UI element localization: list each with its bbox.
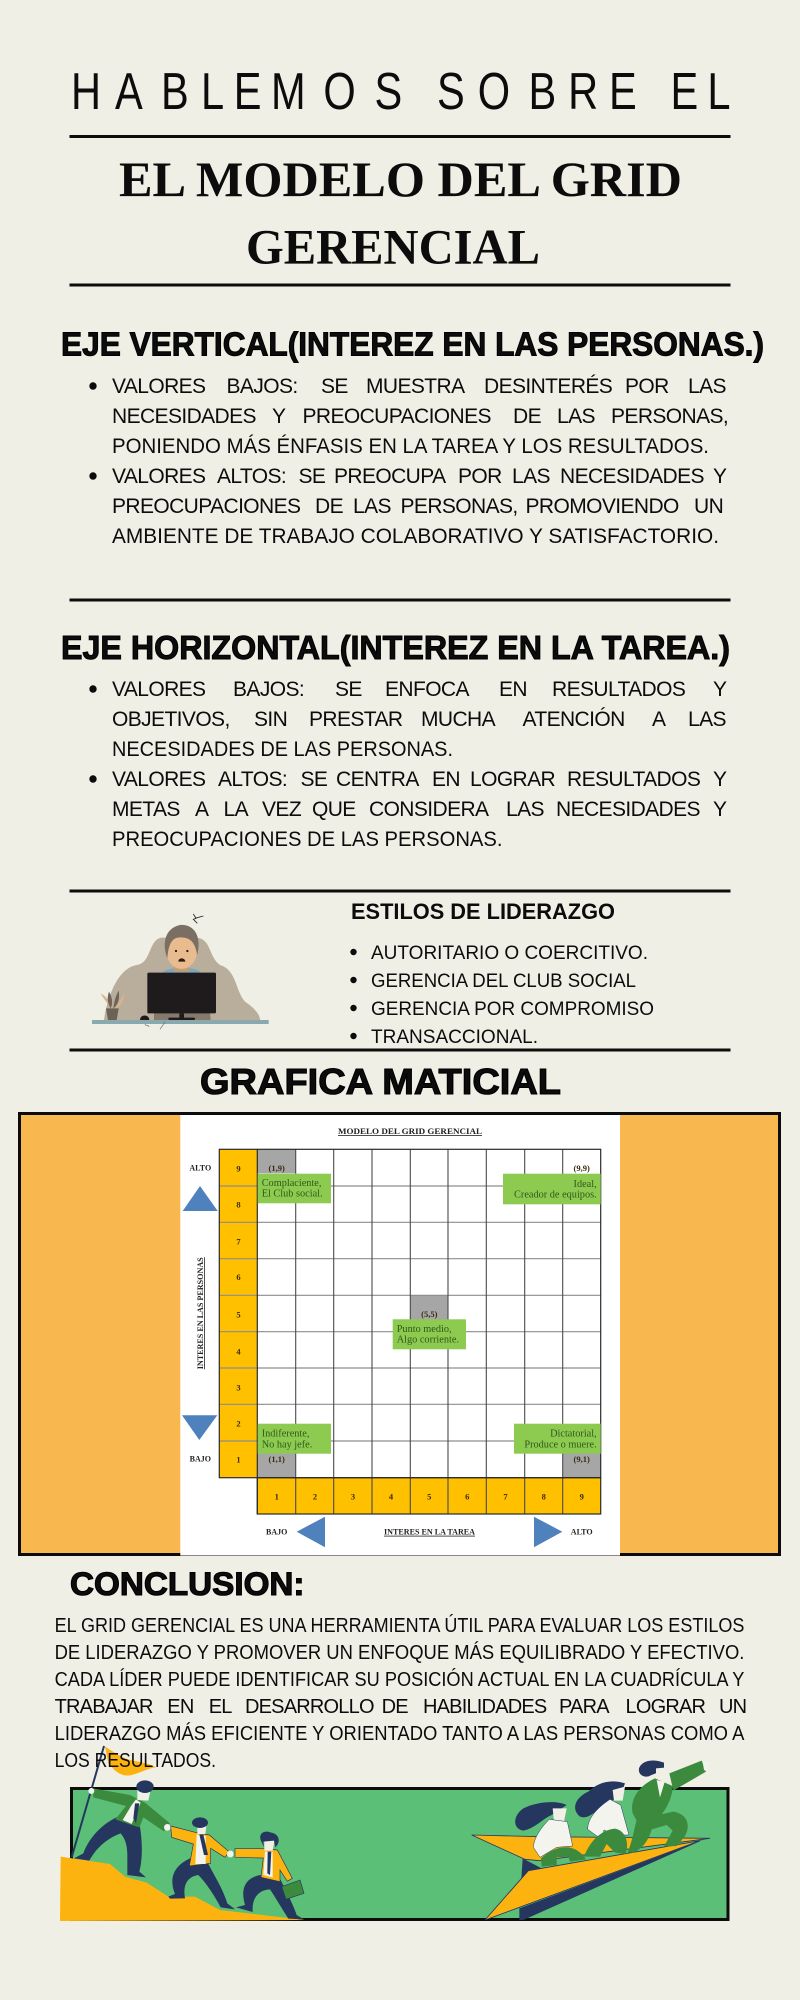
text block: eje vertical bullets: LAS xyxy=(557,405,595,428)
text block: eje horizontal bullets: MUCHA xyxy=(421,708,496,731)
heading: eje vertical: EJE VERTICAL(INTEREZ EN LAS PERSONAS.) xyxy=(61,326,764,364)
text block: eje horizontal bullets: OBJETIVOS, xyxy=(112,708,230,731)
text block: eje horizontal bullets: SIN xyxy=(254,708,287,731)
text block: conclusion: LIDERAZGO MÁS EFICIENTE Y ORIENTADO TANTO A LAS PERSONAS COMO A xyxy=(55,1722,745,1745)
text block: eje vertical bullets: ALTOS: xyxy=(217,465,286,488)
icon: stressed man at desk xyxy=(92,914,269,1029)
text block: estilos list xyxy=(350,943,654,1048)
text block: eje horizontal bullets xyxy=(89,678,727,851)
callout: complaciente xyxy=(258,1174,331,1203)
axis labels and arrows: ALTO xyxy=(189,1163,211,1172)
text block: conclusion xyxy=(55,1614,746,1772)
text block: conclusion: EL GRID GERENCIAL ES UNA HERRAMIENTA ÚTIL PARA EVALUAR LOS ESTILOS xyxy=(55,1614,744,1637)
axis labels and arrows: INTERES EN LAS PERSONAS xyxy=(196,1257,205,1369)
callout: dictatorial: Dictatorial, xyxy=(550,1429,597,1440)
callout: dictatorial: Produce o muere. xyxy=(524,1439,597,1450)
text block: eje horizontal bullets: Y xyxy=(713,768,727,791)
text block: eje horizontal bullets: NECESIDADES DE LAS PERSONAS. xyxy=(112,738,453,761)
text block: eje horizontal bullets: LOGRAR xyxy=(470,768,556,791)
chart: grid: 2 xyxy=(236,1418,241,1428)
text block: eje horizontal bullets: QUE xyxy=(312,798,356,821)
text block: conclusion: DE xyxy=(382,1696,408,1718)
text block: estilos list: GERENCIA POR COMPROMISO xyxy=(371,999,654,1020)
text block: eje vertical bullets: SE xyxy=(298,465,326,488)
text block: eje vertical bullets: VALORES xyxy=(112,465,206,488)
text block: eje horizontal bullets: SE xyxy=(335,678,362,701)
text block: eje horizontal bullets: PRESTAR xyxy=(309,708,403,731)
text block: eje vertical bullets: UN xyxy=(694,495,723,518)
text block: conclusion: LOS RESULTADOS. xyxy=(55,1750,216,1772)
text block: eje vertical bullets: PONIENDO MÁS ÉNFASIS EN LA TAREA Y LOS RESULTADOS. xyxy=(112,435,709,458)
text block: eje horizontal bullets: CONSIDERA xyxy=(369,798,489,821)
chart: grid: (9,1) xyxy=(574,1454,590,1464)
text block: eje vertical bullets: NECESIDADES xyxy=(112,405,257,428)
text block: eje vertical bullets: DE xyxy=(513,405,542,428)
heading: estilos de liderazgo: ESTILOS DE LIDERAZGO xyxy=(351,899,615,924)
text block: eje horizontal bullets: METAS xyxy=(112,798,180,821)
chart: grid: 1 xyxy=(275,1492,279,1502)
text block: eje vertical bullets: PREOCUPA xyxy=(334,465,446,488)
text block: eje horizontal bullets: VALORES xyxy=(112,678,206,701)
text block: conclusion: DE LIDERAZGO Y PROMOVER UN ENFOQUE MÁS EQUILIBRADO Y EFECTIVO. xyxy=(55,1641,744,1664)
illustration: team climbing with flag xyxy=(60,1746,305,1921)
chart: grid: 5 xyxy=(427,1492,431,1502)
title: El modelo del grid gerencial xyxy=(119,151,682,274)
callout: indiferente: Indiferente, xyxy=(262,1429,309,1440)
chart: grid: 2 xyxy=(313,1492,317,1502)
text block: eje horizontal bullets: A xyxy=(652,708,666,731)
text block: estilos list: GERENCIA DEL CLUB SOCIAL xyxy=(371,971,636,992)
panel: green banner xyxy=(72,1788,728,1920)
text block: eje vertical bullets: PERSONAS, xyxy=(400,495,518,518)
text block: estilos list: TRANSACCIONAL. xyxy=(371,1027,538,1048)
callout: ideal: Ideal, xyxy=(574,1179,597,1190)
text block: conclusion: UN xyxy=(719,1696,746,1718)
callout: punto medio: Algo corriente. xyxy=(397,1334,459,1346)
text block: eje vertical bullets: SE xyxy=(321,375,348,398)
text block: eje vertical bullets: LAS xyxy=(353,495,391,518)
text block: eje vertical bullets: POR xyxy=(458,465,502,488)
callout: complaciente: Complaciente, xyxy=(262,1178,321,1189)
chart: grid: 9 xyxy=(236,1164,241,1174)
text block: eje horizontal bullets: A xyxy=(195,798,209,821)
text block: eje vertical bullets: Y xyxy=(713,465,727,488)
chart: grid: 3 xyxy=(236,1383,241,1393)
chart: grid: 7 xyxy=(503,1492,508,1502)
axis labels and arrows xyxy=(182,1163,593,1547)
text block: conclusion: CADA LÍDER PUEDE IDENTIFICAR SU POSICIÓN ACTUAL EN LA CUADRÍCULA Y xyxy=(55,1668,744,1691)
text block: eje vertical bullets: LAS xyxy=(512,465,550,488)
heading: eje horizontal: EJE HORIZONTAL(INTEREZ EN LA TAREA.) xyxy=(61,630,730,667)
text block: eje horizontal bullets: EN xyxy=(499,678,527,701)
text block: conclusion: EL xyxy=(209,1696,232,1718)
text block: eje horizontal bullets: RESULTADOS xyxy=(552,678,686,701)
text block: conclusion: PARA xyxy=(559,1696,610,1718)
text block: eje horizontal bullets: LAS xyxy=(688,708,726,731)
text block: eje vertical bullets: VALORES xyxy=(112,375,206,398)
chart: grid: 9 xyxy=(580,1492,584,1502)
text block: eje vertical bullets xyxy=(89,375,728,548)
text block: eje horizontal bullets: ATENCIÓN xyxy=(522,708,625,731)
text block: eje horizontal bullets: PREOCUPACIONES DE LAS PERSONAS. xyxy=(112,828,502,851)
text block: eje horizontal bullets: CENTRA xyxy=(336,768,419,791)
title: El modelo del grid gerencial: GERENCIAL xyxy=(246,218,540,274)
chart: grid: 8 xyxy=(236,1199,241,1209)
chart: grid: 3 xyxy=(351,1492,355,1502)
text block: eje horizontal bullets: ENFOCA xyxy=(385,678,470,701)
text block: eje vertical bullets: BAJOS: xyxy=(226,375,298,398)
text block: eje vertical bullets: MUESTRA xyxy=(366,375,465,398)
callout: punto medio: Punto medio, xyxy=(397,1324,452,1335)
chart title: MODELO DEL GRID GERENCIAL xyxy=(338,1127,482,1136)
text block: eje vertical bullets: PREOCUPACIONES xyxy=(112,495,301,518)
illustration: women on paper plane xyxy=(472,1761,711,1920)
text block: conclusion: DESARROLLO xyxy=(245,1696,374,1718)
chart: grid: 8 xyxy=(542,1492,546,1502)
text block: eje horizontal bullets: LA xyxy=(224,798,249,821)
callout: ideal: Creador de equipos. xyxy=(514,1190,597,1200)
text block: eje horizontal bullets: NECESIDADES xyxy=(556,798,701,821)
chart: grid: 1 xyxy=(236,1454,241,1464)
text block: eje horizontal bullets: VEZ xyxy=(262,798,302,821)
text block: eje horizontal bullets: Y xyxy=(713,678,727,701)
text block: eje vertical bullets: AMBIENTE DE TRABAJO COLABORATIVO Y SATISFACTORIO. xyxy=(112,525,719,548)
chart: grid: (1,9) xyxy=(269,1163,285,1173)
heading: grafica maticial: GRAFICA MATICIAL xyxy=(200,1061,561,1102)
text block: eje vertical bullets: PROMOVIENDO xyxy=(526,495,679,518)
chart: grid xyxy=(219,1149,601,1514)
title: El modelo del grid gerencial: EL MODELO DEL GRID xyxy=(119,151,682,207)
text block: conclusion: LOGRAR xyxy=(626,1696,706,1718)
axis labels and arrows: BAJO xyxy=(266,1528,287,1537)
chart: grid: 7 xyxy=(236,1237,241,1247)
text block: eje horizontal bullets: BAJOS: xyxy=(233,678,304,701)
text block: eje horizontal bullets: ALTOS: xyxy=(218,768,287,791)
text block: eje vertical bullets: DESINTERÉS xyxy=(484,375,613,398)
chart: grid: (9,9) xyxy=(574,1163,590,1173)
text block: estilos list: AUTORITARIO O COERCITIVO. xyxy=(371,943,648,964)
text block: eje vertical bullets: PREOCUPACIONES xyxy=(302,405,492,428)
callout: punto medio xyxy=(393,1319,466,1349)
text block: eje vertical bullets: DE xyxy=(315,495,344,518)
text block: eje horizontal bullets: EN xyxy=(432,768,460,791)
callout: dictatorial xyxy=(514,1424,601,1454)
title: Hablemos sobre el: HABLEMOS SOBRE EL xyxy=(71,62,730,120)
axis labels and arrows: BAJO xyxy=(190,1455,211,1464)
chart: grid: (5,5) xyxy=(421,1309,438,1319)
text block: eje horizontal bullets: LAS xyxy=(506,798,544,821)
text block: eje vertical bullets: POR xyxy=(625,375,669,398)
axis labels and arrows: ALTO xyxy=(571,1528,593,1537)
text block: eje horizontal bullets: Y xyxy=(713,798,727,821)
text block: conclusion: HABILIDADES xyxy=(423,1696,547,1718)
callout: indiferente xyxy=(258,1424,331,1454)
text block: eje horizontal bullets: VALORES xyxy=(112,768,206,791)
callout: complaciente: El Club social. xyxy=(262,1189,323,1200)
chart: grid: 6 xyxy=(236,1272,241,1282)
callout: ideal xyxy=(503,1174,601,1204)
chart: grid: 6 xyxy=(465,1492,469,1502)
text block: eje vertical bullets: NECESIDADES xyxy=(560,465,705,488)
chart: grid: 4 xyxy=(236,1346,241,1356)
text block: eje vertical bullets: PERSONAS, xyxy=(611,405,728,428)
chart: grid: 5 xyxy=(236,1309,241,1319)
text block: eje vertical bullets: Y xyxy=(272,405,286,428)
chart: grid: (1,1) xyxy=(269,1454,285,1464)
axis labels and arrows: INTERES EN LA TAREA xyxy=(384,1528,475,1537)
text block: eje horizontal bullets: SE xyxy=(300,768,328,791)
callout: indiferente: No hay jefe. xyxy=(262,1439,312,1450)
heading: conclusion: CONCLUSION: xyxy=(70,1566,304,1602)
panel: grafica xyxy=(20,1114,780,1556)
text block: conclusion: TRABAJAR xyxy=(55,1696,153,1718)
text block: eje horizontal bullets: RESULTADOS xyxy=(567,768,701,791)
chart: grid: 4 xyxy=(389,1492,394,1502)
text block: eje vertical bullets: LAS xyxy=(688,375,726,398)
text block: conclusion: EN xyxy=(167,1696,193,1718)
